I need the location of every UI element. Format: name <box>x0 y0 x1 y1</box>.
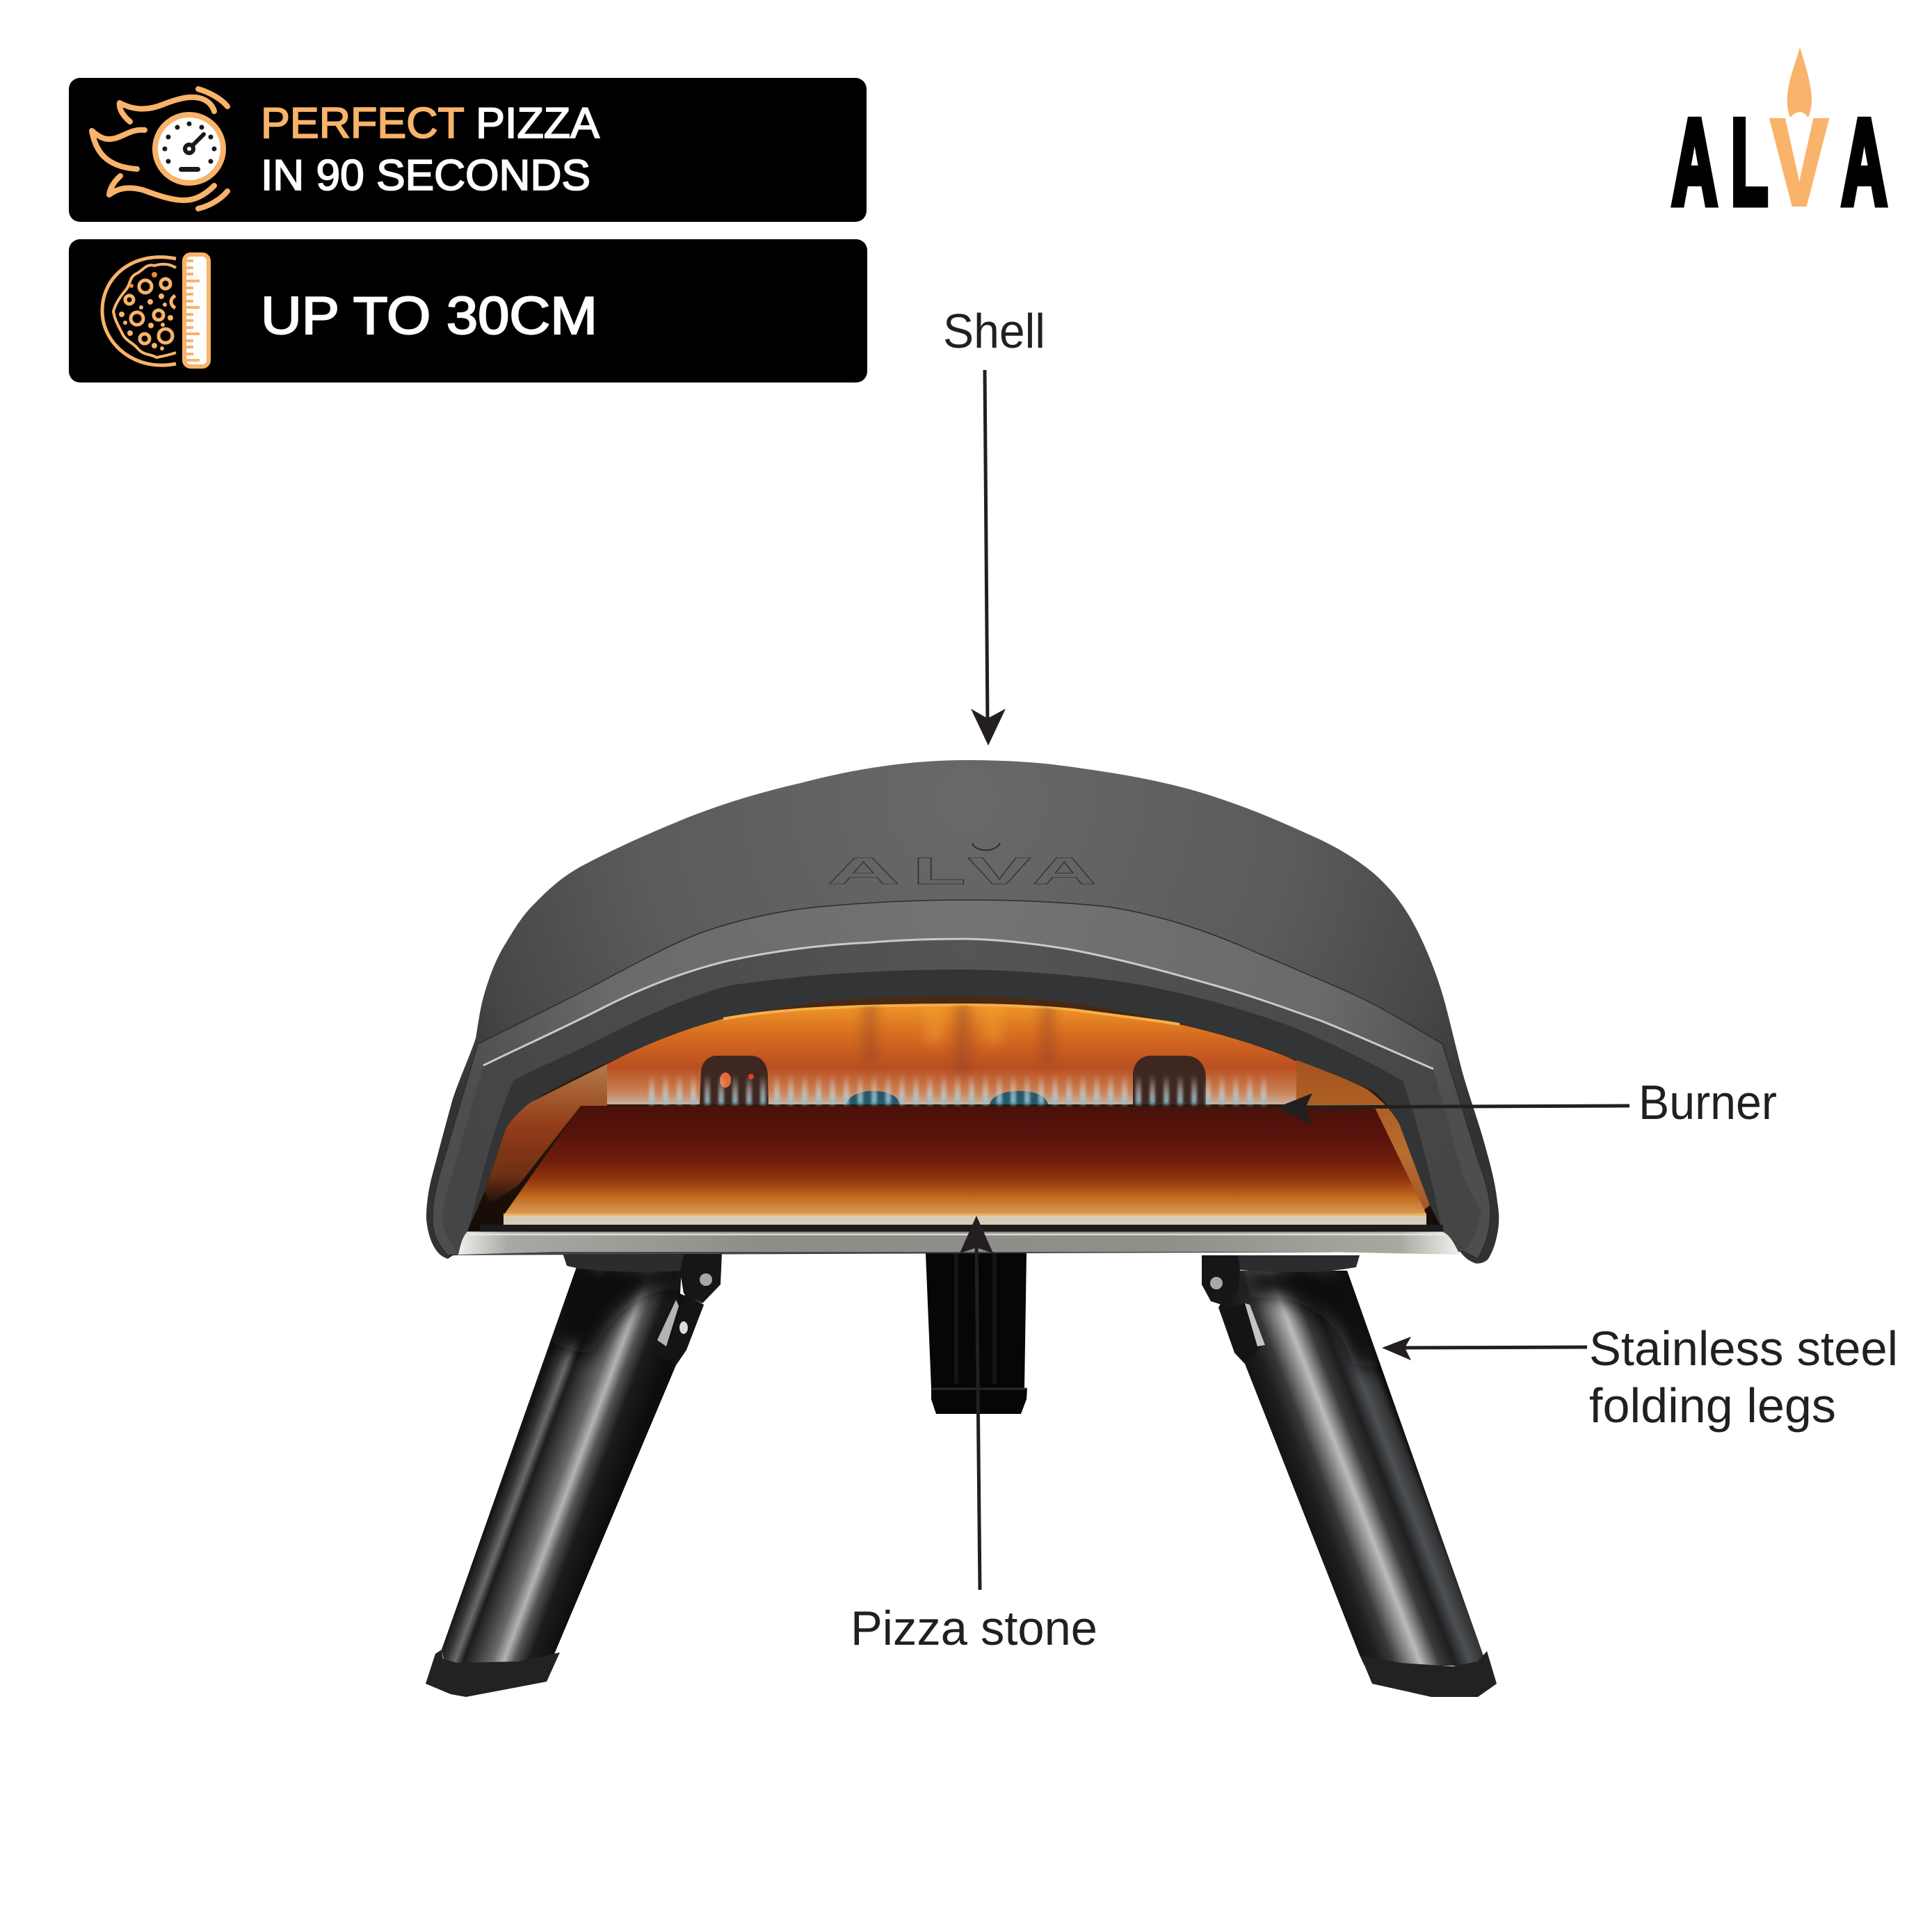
label and arrow: pizza stone <box>851 1216 1097 1655</box>
label and arrow: shell <box>943 304 1045 746</box>
pizza stone <box>504 1106 1426 1225</box>
oven inner dark lip <box>467 969 1443 1234</box>
label and arrow: stainless steel folding legs: folding legs <box>1589 1378 1836 1433</box>
label and arrow: stainless steel folding legs: Stainless steel <box>1589 1321 1898 1376</box>
embossed logo <box>827 843 1097 892</box>
info bar: up to 30cm <box>69 239 867 383</box>
embossed logo: A <box>827 850 900 892</box>
info bar: perfect pizza in 90 seconds <box>69 78 867 222</box>
left rubber foot <box>426 1650 560 1697</box>
left leg mount <box>563 1253 684 1272</box>
icon: logo flame <box>1787 47 1812 118</box>
right side wall <box>1296 1060 1430 1214</box>
logo: alva <box>1672 47 1887 231</box>
oven left folding leg <box>426 1253 722 1697</box>
icon: flames around temperature gauge <box>92 89 227 209</box>
left side wall <box>485 1064 607 1203</box>
embossed logo: V <box>967 850 1031 892</box>
embossed logo: L <box>912 849 966 892</box>
right rubber foot <box>1360 1651 1497 1697</box>
right leg bracket <box>1202 1255 1240 1306</box>
label and arrow: pizza stone: Pizza stone <box>851 1601 1097 1655</box>
pizza oven <box>426 760 1499 1697</box>
icon: gauge face <box>155 115 223 183</box>
heading: up to 30cm: UP TO 30CM <box>261 287 597 346</box>
back wall <box>607 1001 1296 1104</box>
label and arrow: shell: Shell <box>943 304 1045 358</box>
left leg bracket <box>680 1253 722 1303</box>
burner ports <box>700 1056 1206 1104</box>
embossed logo: A <box>1032 849 1097 892</box>
label and arrow: burner: Burner <box>1639 1075 1777 1129</box>
oven door recess <box>442 939 1481 1255</box>
heading: perfect pizza in 90 seconds: PERFECT PIZZA <box>261 99 600 147</box>
icon: half pizza with ruler <box>102 255 209 367</box>
heading: perfect pizza in 90 seconds <box>261 99 600 200</box>
logo: alva: V <box>1771 94 1828 231</box>
right leg mount <box>1234 1255 1360 1272</box>
logo: alva: L <box>1731 95 1768 230</box>
label and arrow: stainless steel folding legs <box>1382 1321 1898 1433</box>
label and arrow: burner <box>1275 1075 1777 1129</box>
heading: perfect pizza in 90 seconds: IN 90 SECONDS <box>261 152 590 200</box>
oven outer band <box>433 900 1490 1259</box>
oven opening <box>467 996 1443 1231</box>
oven shell <box>426 760 1499 1264</box>
logo: alva: A <box>1672 95 1717 230</box>
oven rear leg <box>926 1253 1027 1414</box>
burner flames <box>645 1074 1266 1104</box>
oven right folding leg <box>1202 1255 1497 1697</box>
steel tray <box>458 1225 1460 1255</box>
logo: alva: A <box>1842 95 1887 230</box>
